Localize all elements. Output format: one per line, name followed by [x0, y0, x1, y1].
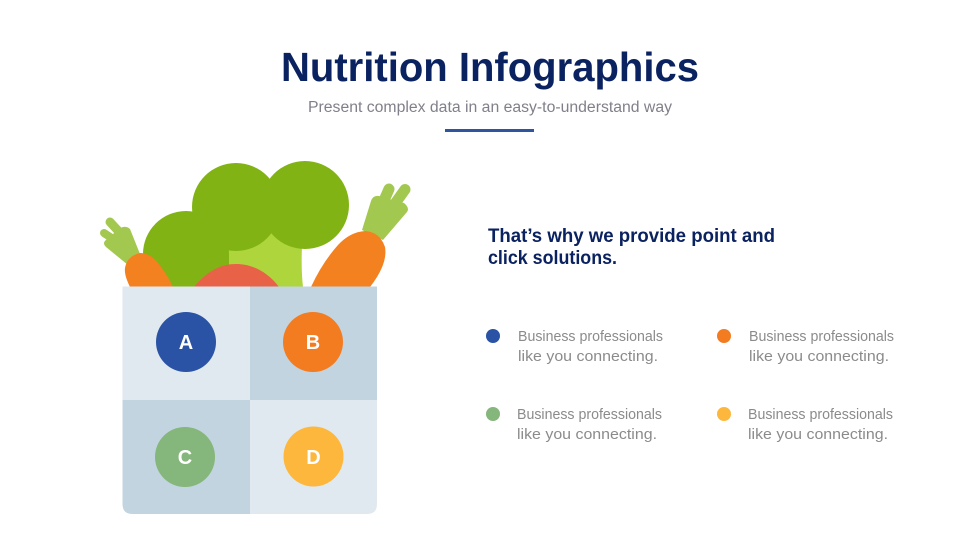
icon: broccoli florets	[143, 161, 349, 297]
illustration: vegetable bag	[104, 161, 408, 514]
badge A	[156, 312, 216, 372]
icon: right carrot	[311, 231, 385, 287]
list item C: like you connecting.	[517, 426, 657, 443]
heading text	[488, 226, 775, 269]
list item A: Business professionals	[518, 328, 663, 345]
heading text: That’s why we provide point and	[488, 226, 775, 247]
icon: right carrot leaves	[362, 189, 408, 240]
badge C: C	[178, 447, 192, 469]
title: Nutrition Infographics	[281, 44, 699, 90]
panel: bag grid	[122, 286, 377, 514]
list item A: like you connecting.	[518, 348, 658, 365]
list item D: Business professionals	[748, 406, 893, 423]
badge D: D	[306, 447, 321, 469]
badge B: B	[306, 332, 320, 354]
list item C: Business professionals	[517, 406, 662, 423]
list item B: Business professionals	[749, 328, 894, 345]
icon: broccoli stem	[228, 232, 303, 287]
list item D: like you connecting.	[748, 426, 888, 443]
subtitle: Present complex data in an easy-to-understand way	[308, 99, 672, 116]
list item A	[486, 328, 663, 365]
icon: left carrot leaves	[104, 222, 140, 265]
icon: left carrot	[125, 253, 173, 287]
list item B	[717, 328, 894, 365]
badge A: A	[179, 332, 193, 354]
badge C	[155, 427, 215, 487]
badge B	[283, 312, 343, 372]
icon: tomato	[194, 264, 279, 287]
list item C	[486, 406, 662, 443]
list item D	[717, 406, 893, 443]
heading text: click solutions.	[488, 248, 617, 269]
badge D	[284, 426, 344, 486]
list item B: like you connecting.	[749, 348, 889, 365]
title underline	[445, 129, 534, 132]
